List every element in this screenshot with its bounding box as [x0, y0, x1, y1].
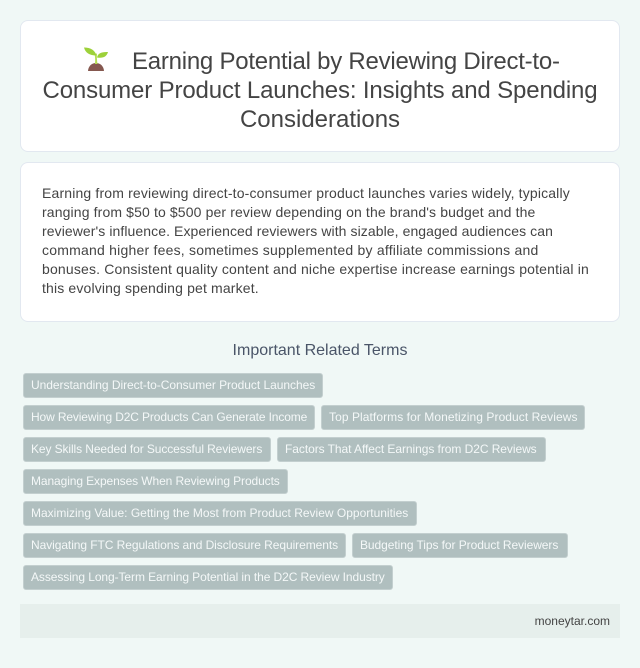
heading: related terms: Important Related Terms	[233, 342, 407, 359]
icon: sprout	[84, 48, 108, 71]
panel: summary	[20, 162, 620, 322]
tag: Key Skills Needed for Successful Reviewers	[31, 442, 262, 456]
tag: Assessing Long-Term Earning Potential in the D2C Review Industry	[31, 570, 385, 584]
tag: Understanding Direct-to-Consumer Product Launches	[31, 378, 315, 392]
summary text: Earning from reviewing direct-to-consumer product launches varies widely, typically	[42, 185, 570, 201]
tag	[23, 533, 346, 558]
tag: Budgeting Tips for Product Reviewers	[360, 538, 558, 552]
tag	[23, 469, 288, 494]
tag: Factors That Affect Earnings from D2C Reviews	[285, 442, 537, 456]
summary text	[42, 185, 589, 296]
summary text: ranging from $50 to $500 per review depending on the brand's budget and the	[42, 204, 535, 220]
panel: title card	[20, 20, 620, 152]
tag: Managing Expenses When Reviewing Products	[31, 474, 280, 488]
footer: moneytar.com	[535, 614, 610, 628]
summary text: command higher fees, sometimes supplemented by affiliate commissions and	[42, 242, 538, 258]
tag	[352, 533, 568, 558]
tag	[277, 437, 546, 462]
title: Earning Potential by Reviewing Direct-to-	[132, 48, 560, 75]
tag	[23, 405, 315, 430]
footer	[20, 604, 620, 638]
tag	[23, 501, 417, 526]
tag	[23, 565, 393, 590]
tag list	[23, 373, 585, 590]
tag: Maximizing Value: Getting the Most from Product Review Opportunities	[31, 506, 408, 520]
tag	[23, 373, 323, 398]
tag	[321, 405, 585, 430]
summary text: reviewer's influence. Experienced reviewers with sizable, engaged audiences can	[42, 223, 553, 239]
tag	[23, 437, 271, 462]
summary text: bonuses. Consistent quality content and niche expertise increase earnings potential in	[42, 261, 589, 277]
title	[42, 48, 597, 133]
tag: Navigating FTC Regulations and Disclosure Requirements	[31, 538, 338, 552]
summary text: this evolving spending pet market.	[42, 280, 259, 296]
title: Consumer Product Launches: Insights and Spending	[42, 77, 597, 104]
tag: How Reviewing D2C Products Can Generate Income	[31, 410, 307, 424]
title: Considerations	[240, 106, 400, 133]
tag: Top Platforms for Monetizing Product Reviews	[329, 410, 578, 424]
